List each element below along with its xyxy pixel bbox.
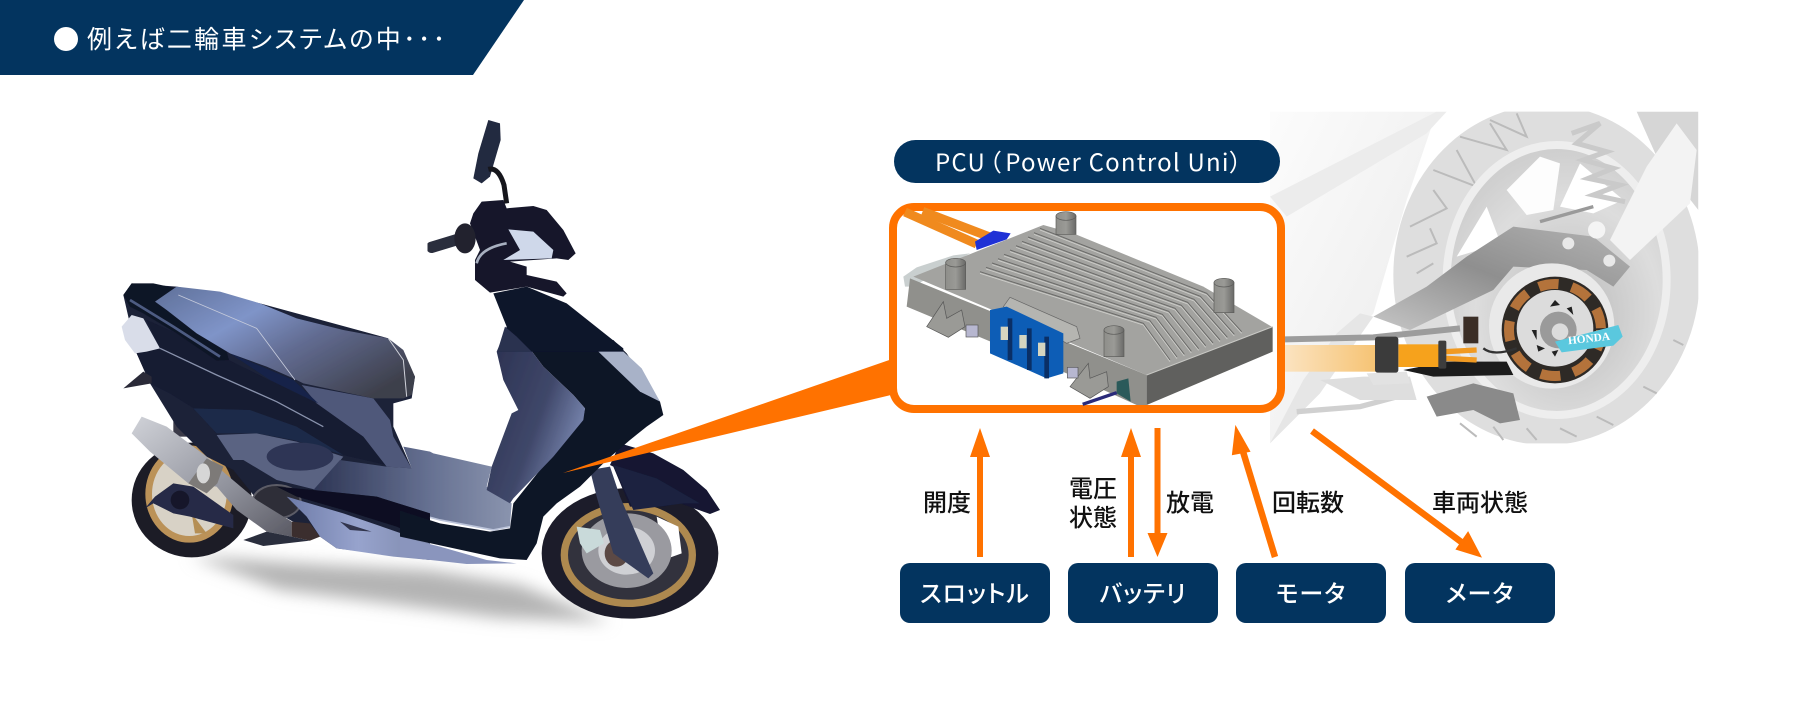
rear suspension [173, 410, 197, 437]
left side [907, 278, 1147, 405]
cables [1445, 350, 1477, 360]
swing brace [145, 483, 233, 528]
stator [1489, 263, 1614, 389]
ground shadow [190, 556, 610, 622]
signal connector [1117, 378, 1131, 402]
box: メータ: メータ [1446, 574, 1514, 609]
arrow: battery voltage to PCU [1121, 428, 1141, 557]
photo: scooter [122, 120, 720, 622]
body silhouette [123, 283, 430, 560]
fender [610, 443, 720, 514]
headlight [598, 350, 660, 402]
honda tag [1555, 325, 1623, 352]
arrow: PCU to meter [1312, 431, 1480, 556]
label: 電圧状態: 状態 [1069, 498, 1117, 533]
top plate [913, 225, 1272, 375]
white band [1610, 123, 1697, 260]
PCU frame [893, 207, 1281, 409]
scooter rear half [122, 283, 430, 560]
arrow: motor to PCU [1233, 428, 1275, 557]
box: モータ: モータ [1276, 574, 1346, 609]
grip [432, 237, 467, 247]
tyre [1393, 105, 1700, 445]
PCU illustration [903, 211, 1273, 405]
label plates [966, 325, 978, 337]
brackets [927, 302, 965, 337]
heatsink ridge [1003, 297, 1080, 343]
signal cable [1083, 393, 1117, 404]
mirror stem [488, 169, 507, 203]
faded hose [1285, 345, 1377, 372]
lower strip [277, 487, 430, 542]
orange hose [1398, 344, 1442, 367]
arrow: throttle to PCU [970, 428, 990, 557]
frame pipe [1296, 400, 1395, 414]
strut [1540, 207, 1593, 222]
label: 電圧状態: 電圧 [1069, 469, 1117, 504]
callout wedge [563, 358, 895, 473]
tail light [122, 315, 160, 353]
terminal block [990, 307, 1063, 378]
lower tread [1427, 383, 1520, 423]
box: モータ [1236, 563, 1386, 623]
label: 回転数: 回転数 [1272, 483, 1344, 518]
label: 開度: 開度 [923, 483, 971, 518]
bolts [1562, 237, 1574, 249]
main dark body [137, 320, 387, 465]
spring [1572, 123, 1625, 202]
floor front [430, 452, 512, 530]
floor rear [313, 447, 430, 513]
brake cable [477, 243, 507, 263]
box: バッテリ [1068, 563, 1218, 623]
exhaust full length [132, 417, 292, 537]
dark motor base [1403, 362, 1513, 377]
body top [493, 287, 623, 352]
left connector [903, 253, 970, 287]
tail fin [123, 372, 152, 388]
right side [1147, 327, 1273, 405]
scooter front half [400, 340, 720, 619]
label: 放電: 放電 [1166, 483, 1214, 518]
side panel [217, 433, 343, 490]
under seat panel [302, 385, 412, 468]
signal lamp [503, 229, 553, 260]
underbelly [287, 497, 430, 560]
box: スロットル [900, 563, 1050, 623]
box: スロットル: スロットル [920, 574, 1030, 609]
clamps [1375, 337, 1398, 373]
fairing [1270, 112, 1437, 443]
fan [253, 485, 301, 518]
label: 車両状態: 車両状態 [1432, 483, 1528, 518]
tail top [123, 283, 229, 361]
front wheel [542, 488, 718, 619]
blue connector [975, 231, 1011, 250]
honda tag: HONDA [1567, 331, 1611, 347]
rim windows [1457, 207, 1501, 257]
heading banner: 例えば二輪車システムの中･･･ [87, 20, 448, 56]
fork [590, 467, 653, 578]
standoffs [946, 212, 1234, 357]
box: バッテリ: バッテリ [1099, 574, 1187, 609]
rear wheel [132, 443, 252, 557]
photo: motor and wheel [1270, 105, 1700, 445]
seat [155, 287, 415, 398]
label: 電圧状態 [1069, 469, 1117, 533]
fins [980, 228, 1242, 360]
heading banner [0, 0, 524, 75]
headset [470, 200, 576, 297]
seat stripe [230, 353, 318, 403]
mirror [473, 120, 501, 183]
scooter handlebar [432, 120, 623, 352]
swing arm [1373, 227, 1630, 330]
orange cables [905, 212, 977, 244]
cone [188, 458, 223, 493]
leg shield [487, 340, 585, 503]
arrow: discharge from PCU to battery [1148, 428, 1168, 557]
upper cable [1285, 328, 1460, 339]
underbelly front [400, 537, 517, 564]
main front body [400, 340, 663, 560]
PCU title pill: PCU（Power Control Uni） [935, 143, 1243, 178]
rim face [1447, 145, 1667, 415]
PCU title pill [894, 140, 1280, 183]
box: メータ [1405, 563, 1555, 623]
